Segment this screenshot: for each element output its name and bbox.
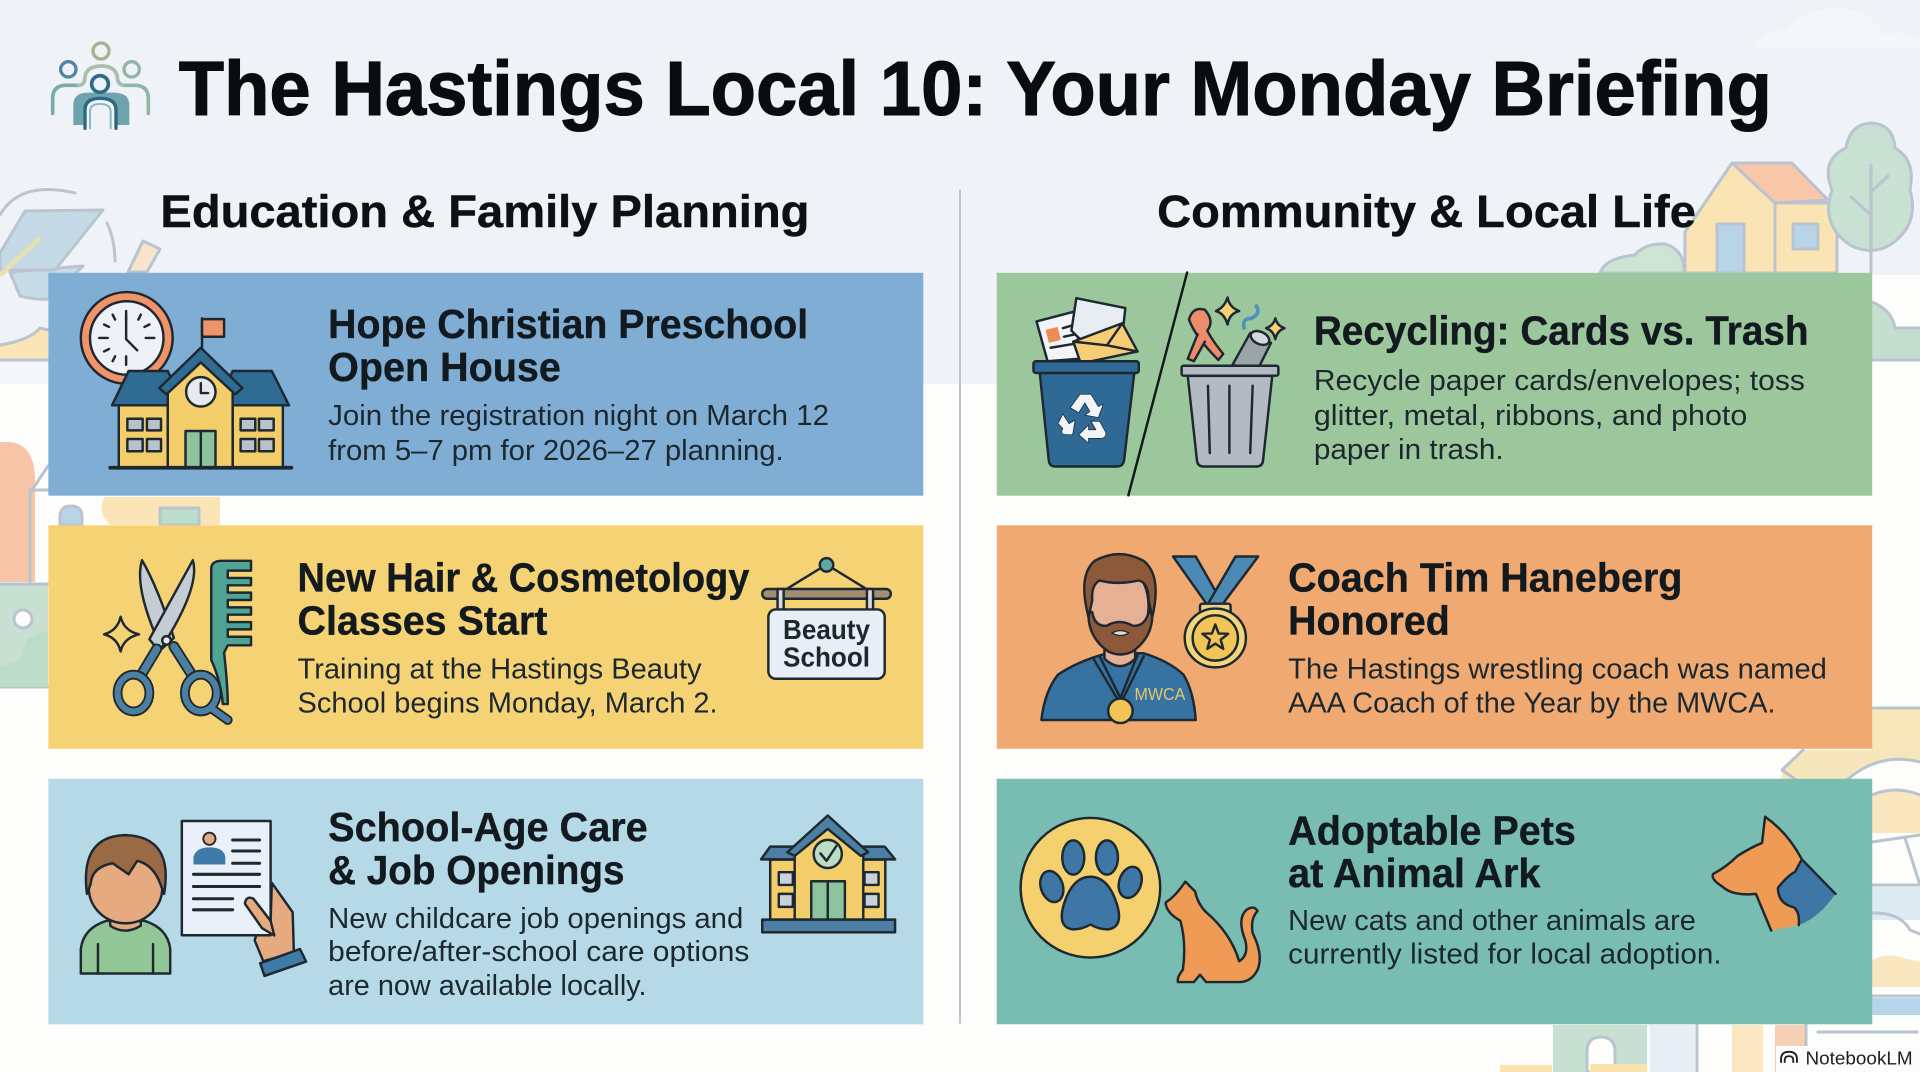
heading: New Hair & Cosmetology xyxy=(298,554,750,600)
body text: Training at the Hastings Beauty xyxy=(298,654,702,686)
icon: Beauty School sign xyxy=(762,558,891,679)
body text: New childcare job openings and xyxy=(328,903,743,935)
panel: Recycling xyxy=(997,272,1872,496)
icon: Beauty School sign: Beauty xyxy=(783,614,870,645)
heading: School-Age Care xyxy=(328,804,648,850)
icon: coach portrait and medal xyxy=(1041,554,1258,723)
panel: Hope Christian Preschool xyxy=(48,273,923,496)
body text: Recycle paper cards/envelopes; toss xyxy=(1314,365,1805,397)
body text line 2: School begins Monday, March 2. xyxy=(298,688,718,720)
watermark: NotebookLM xyxy=(1781,1048,1913,1069)
panel: New Hair and Cosmetology xyxy=(48,525,923,749)
column divider xyxy=(959,190,961,1024)
body text: New cats and other animals are xyxy=(1288,905,1696,937)
body text line 2: before/after-school care options xyxy=(328,936,749,968)
body text line 2: from 5–7 pm for 2026–27 planning. xyxy=(328,435,784,467)
heading: education column: Education & Family Planning xyxy=(160,186,809,237)
heading: Coach Tim Haneberg xyxy=(1288,554,1682,600)
body text line 2: AAA Coach of the Year by the MWCA. xyxy=(1288,688,1776,720)
heading line 2: Classes Start xyxy=(298,597,547,643)
icon: paw badge xyxy=(1021,818,1160,958)
body text line 2: currently listed for local adoption. xyxy=(1288,939,1722,971)
icon: coach portrait and medal: MWCA xyxy=(1134,684,1186,704)
icon: cat xyxy=(1166,882,1260,982)
panel: Coach Tim Haneberg xyxy=(997,525,1872,749)
heading line 2: Open House xyxy=(328,344,561,390)
heading: Hope Christian Preschool xyxy=(328,301,808,347)
icon: sparkle, scissors and comb xyxy=(104,560,251,720)
body text line 3: are now available locally. xyxy=(328,970,647,1002)
icon: person and resume xyxy=(81,821,306,976)
heading line 2: & Job Openings xyxy=(328,847,624,893)
panel: School-Age Care and Job Openings xyxy=(48,779,923,1024)
icon: recycling bin versus trash can xyxy=(1033,272,1284,495)
panel: Adoptable Pets xyxy=(997,779,1872,1024)
body text: The Hastings wrestling coach was named xyxy=(1288,654,1827,686)
heading: community column: Community & Local Life xyxy=(1157,186,1696,237)
body text line 3: paper in trash. xyxy=(1314,434,1504,466)
icon: school with check xyxy=(761,816,895,932)
heading line 2: Honored xyxy=(1288,597,1450,643)
icon: Beauty School sign: School xyxy=(783,642,870,673)
heading: Adoptable Pets xyxy=(1288,807,1576,853)
label: NotebookLM xyxy=(1806,1048,1913,1069)
icon: dog xyxy=(1713,817,1836,931)
body text line 2: glitter, metal, ribbons, and photo xyxy=(1314,400,1747,432)
icon: clock and school xyxy=(81,292,291,468)
heading: Recycling: Cards vs. Trash xyxy=(1314,307,1809,353)
body text: Join the registration night on March 12 xyxy=(328,400,829,432)
main title: The Hastings Local 10: Your Monday Briefing xyxy=(179,46,1772,132)
header icon: group of people xyxy=(53,43,148,128)
icon: notebook arcs xyxy=(1781,1052,1797,1063)
heading line 2: at Animal Ark xyxy=(1288,850,1541,896)
